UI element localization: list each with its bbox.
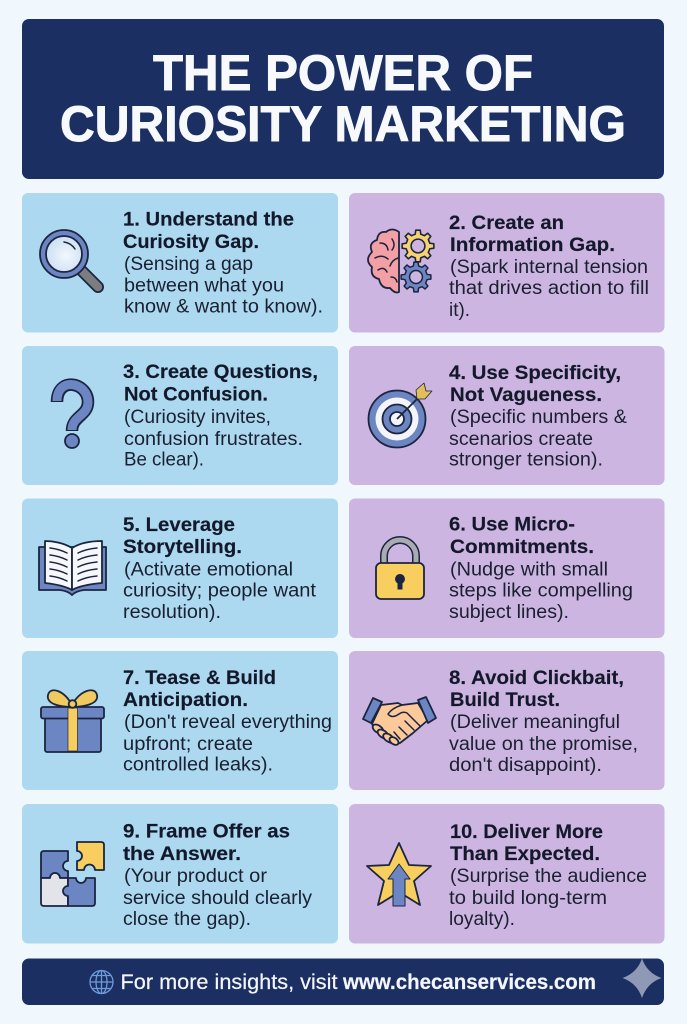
panel: 10. Deliver More Than Expected (349, 804, 664, 944)
text: card 4 (449, 362, 627, 470)
text: card 4: scenarios create (449, 429, 593, 450)
text: card 4: 4. Use Specificity, (449, 362, 621, 384)
text: card 6 (449, 514, 633, 623)
text: card 8: 8. Avoid Clickbait, (449, 667, 624, 689)
icon: puzzle pieces (41, 842, 104, 906)
text: card 6: (Nudge with small (450, 560, 608, 580)
footer text (120, 971, 596, 994)
text: card 8 (449, 667, 638, 776)
text: card 5: curiosity; people want (123, 580, 317, 602)
text: card 3: Not Confusion. (124, 384, 268, 406)
icon: sparkle (622, 958, 662, 998)
text: card 9: close the gap). (123, 909, 251, 930)
panel: 4. Use Specificity, Not Vagueness (349, 346, 664, 485)
panel: 9. Frame Offer as the Answer (22, 804, 338, 944)
text: card 5: Storytelling. (123, 536, 242, 558)
icon: padlock (376, 540, 424, 599)
panel: 6. Use Micro-Commitments (349, 498, 664, 638)
panel: 8. Avoid Clickbait, Build Trust (349, 651, 664, 790)
text: card 4: Not Vagueness. (450, 384, 602, 406)
text: card 7: upfront; create (123, 734, 253, 755)
text: card 1 (123, 208, 323, 318)
panel: 5. Leverage Storytelling (22, 498, 338, 638)
footer text: www.checanservices.com (342, 971, 596, 994)
text: card 4: stronger tension). (449, 450, 603, 470)
text: card 1: 1. Understand the (123, 208, 294, 230)
text: card 7: 7. Tease & Build (123, 667, 276, 689)
text: card 7: controlled leaks). (123, 754, 273, 776)
text: card 6: 6. Use Micro- (449, 514, 575, 536)
footer text: For more insights, visit (120, 971, 338, 994)
text: card 1: (Sensing a gap (124, 254, 253, 275)
text: card 3: (Curiosity invites, (124, 407, 271, 428)
panel: 1. Understand the Curiosity Gap (22, 193, 338, 332)
text: card 2: it). (449, 300, 470, 321)
text: card 1: know & want to know). (124, 296, 323, 318)
text: card 5: resolution). (123, 602, 221, 623)
text: card 1: Curiosity Gap. (123, 231, 259, 253)
icon: brain and gears (368, 230, 434, 292)
text: card 7 (123, 667, 332, 776)
text: card 3: confusion frustrates. (124, 429, 303, 450)
panel: 7. Tease & Build Anticipation (22, 651, 338, 790)
text: card 8: Build Trust. (450, 689, 560, 711)
text: card 6: Commitments. (450, 536, 594, 558)
title: CURIOSITY MARKETING (60, 96, 626, 152)
text: card 9: 9. Frame Offer as (123, 820, 290, 842)
text: card 2: (Spark internal tension (450, 257, 648, 278)
text: card 6: subject lines). (449, 602, 569, 623)
text: card 10: loyalty). (449, 909, 515, 930)
text: card 10: (Surprise the audience (450, 866, 647, 887)
text: card 5 (123, 514, 317, 623)
text: card 2: that drives action to fill (449, 278, 649, 299)
footer bar (22, 958, 664, 1005)
text: card 3: 3. Create Questions, (123, 361, 318, 383)
text: card 9: service should clearly (123, 888, 313, 909)
header banner (22, 19, 664, 179)
icon: gift box (41, 690, 104, 752)
text: card 10 (449, 821, 647, 930)
text: card 1: between what you (124, 276, 284, 296)
icon: handshake (363, 697, 436, 746)
text: card 8: don't disappoint). (449, 755, 602, 776)
text: card 9: (Your product or (124, 866, 268, 887)
text: card 4: (Specific numbers & (450, 407, 627, 428)
text: card 8: value on the promise, (449, 734, 638, 755)
text: card 9 (123, 820, 313, 930)
text: card 10: Than Expected. (450, 843, 600, 865)
icon: target with arrow (368, 383, 432, 448)
text: card 3 (123, 361, 318, 470)
text: card 5: 5. Leverage (123, 514, 235, 536)
title: THE POWER OF (153, 45, 533, 101)
text: card 9: the Answer. (123, 843, 241, 865)
panel: 2. Create an Information Gap (349, 193, 664, 332)
text: card 3: Be clear). (124, 450, 204, 470)
icon: open book (39, 541, 106, 595)
text: card 5: (Activate emotional (124, 560, 293, 580)
panel: 3. Create Questions, Not Confusion (22, 346, 338, 485)
icon: magnifying glass (40, 230, 98, 287)
text: card 10: to build long-term (449, 888, 607, 909)
text: card 2 (449, 212, 649, 321)
text: card 2: 2. Create an (449, 212, 564, 234)
text: card 8: (Deliver meaningful (450, 712, 620, 733)
title (60, 45, 626, 152)
text: card 6: steps like compelling (449, 580, 633, 602)
text: card 7: (Don't reveal everything (124, 712, 332, 733)
text: card 10: 10. Deliver More (450, 821, 603, 843)
icon: globe (90, 970, 113, 994)
icon: question mark (57, 385, 88, 448)
text: card 2: Information Gap. (450, 234, 615, 256)
text: card 7: Anticipation. (123, 689, 248, 711)
icon: star with up arrow (367, 843, 431, 906)
